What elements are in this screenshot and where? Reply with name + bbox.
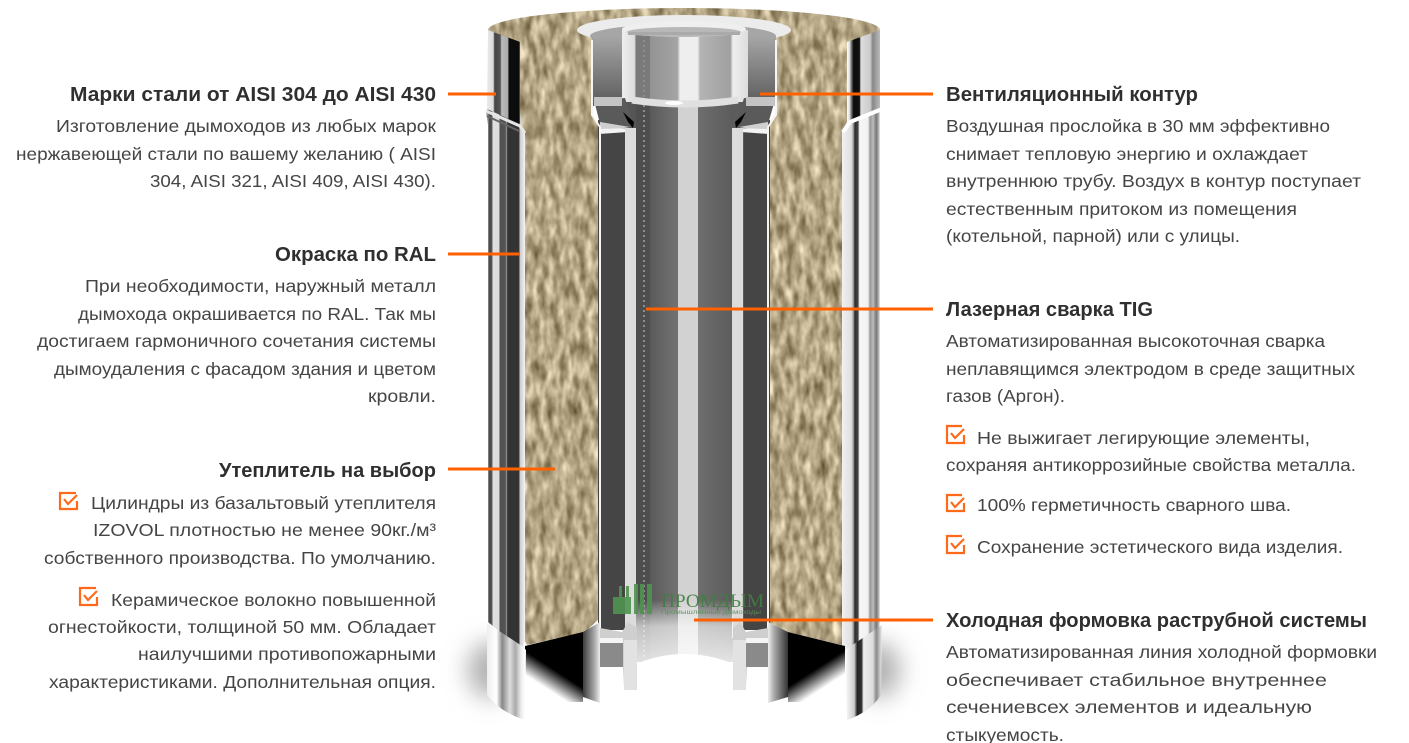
item text 1 (946, 428, 1356, 475)
ground shadow right (856, 642, 900, 698)
lower joint left (600, 622, 637, 690)
right outer wall (842, 30, 882, 650)
right text block: cold forming (946, 609, 1377, 743)
watermark icon (613, 584, 652, 614)
lower joint right (733, 622, 769, 690)
central highlight band (678, 102, 698, 662)
body: обеспечивает стабильное внутреннее (946, 670, 1327, 690)
body: Автоматизированная линия холодной формовки (946, 642, 1377, 662)
item text 3: Сохранение эстетического вида изделия. (977, 537, 1343, 557)
left bracket (592, 40, 636, 638)
right insulation section (768, 40, 847, 645)
heading: Окраска по RAL (275, 243, 436, 266)
heading: Утеплитель на выбор (219, 459, 436, 482)
joint highlight (632, 100, 738, 104)
leader lines (448, 94, 933, 620)
body (946, 642, 1377, 743)
body: (котельной, парной) или с улицы. (946, 226, 1240, 246)
watermark tagline: Промышленные дымоходы (661, 610, 761, 616)
item text 1: Не выжигает легирующие элементы, (977, 428, 1310, 448)
seam (636, 102, 650, 662)
insulation top face (488, 8, 880, 52)
body (946, 116, 1361, 246)
heading: Холодная формовка раструбной системы (946, 609, 1367, 632)
item text 2: наилучшими противопожарными (138, 644, 436, 664)
body: естественным притоком из помещения (946, 199, 1297, 219)
ground shadow left (468, 642, 512, 698)
right flared socket (845, 625, 882, 720)
body: снимает тепловую энергию и охлаждает (946, 144, 1308, 164)
body: Автоматизированная высокоточная сварка (946, 331, 1325, 351)
body: внутреннюю трубу. Воздух в контур поступает (946, 171, 1361, 191)
item text 1: сохраняя антикоррозийные свойства металла. (946, 455, 1356, 475)
right bracket (732, 40, 776, 638)
body: кровли. (368, 386, 436, 406)
body: газов (Аргон). (946, 386, 1065, 406)
right lower void (768, 622, 845, 703)
lower gap section (598, 120, 770, 630)
body: Воздушная прослойка в 30 мм эффективно (946, 116, 1330, 136)
watermark name: ПРОМДЫМ (661, 591, 764, 612)
inner tube (622, 21, 748, 662)
icon: checkbox (947, 495, 964, 511)
item text 1 (44, 493, 436, 568)
body: дымоудаления с фасадом здания и цветом (54, 359, 436, 379)
icon: checkbox (60, 493, 77, 509)
body: сечениевсех элементов и идеальную (946, 697, 1312, 717)
chimney pipe cutaway illustration (468, 8, 900, 743)
item text 2 (48, 590, 436, 692)
item text 1: Цилиндры из базальтовый утеплителя (91, 493, 436, 513)
body: 304, AISI 321, AISI 409, AISI 430). (150, 171, 436, 191)
item text 1: IZOVOL плотностью не менее 90кг./м³ (93, 520, 436, 540)
body: дымохода окрашивается по RAL. Так мы (78, 304, 436, 324)
body: неплавящимся электродом в среде защитных (946, 359, 1355, 379)
icon: checkbox (947, 426, 964, 443)
white interior base (510, 630, 860, 743)
heading: Лазерная сварка TIG (946, 298, 1153, 321)
body (16, 116, 436, 191)
heading: Вентиляционный контур (946, 83, 1198, 106)
flange ring (577, 15, 791, 106)
heading: Марки стали от AISI 304 до AISI 430 (70, 83, 436, 106)
left outer wall (486, 30, 525, 650)
icon: checkbox (947, 536, 964, 553)
icon: checkbox (80, 588, 97, 605)
tube lower fade (636, 600, 733, 666)
body (37, 276, 436, 406)
body: нержавеющей стали по вашему желанию ( AISI (16, 144, 436, 164)
left insulation section (520, 40, 598, 645)
right text block: ventilation (946, 83, 1361, 246)
item text 1: собственного производства. По умолчанию. (44, 548, 436, 568)
body: При необходимости, наружный металл (85, 276, 436, 296)
item text 2: огнестойкости, толщиной 50 мм. Обладает (48, 617, 436, 637)
left flared socket (487, 623, 526, 720)
left lower void (525, 622, 600, 703)
left text block: RAL paint (37, 243, 436, 406)
item text 2: Керамическое волокно повышенной (111, 590, 436, 610)
right text block: TIG welding (946, 298, 1356, 557)
watermark logo (613, 584, 764, 616)
item text 2: 100% герметичность сварного шва. (977, 495, 1291, 515)
left text block: steel grades (16, 83, 436, 191)
body: достигаем гармоничного сочетания системы (37, 331, 436, 351)
left text block: insulation (44, 459, 436, 692)
item text 2: характеристиками. Дополнительная опция. (49, 672, 436, 692)
tube bottom opening (636, 654, 734, 700)
body (946, 331, 1355, 406)
tube lip (622, 21, 746, 37)
body: Изготовление дымоходов из любых марок (56, 116, 436, 136)
